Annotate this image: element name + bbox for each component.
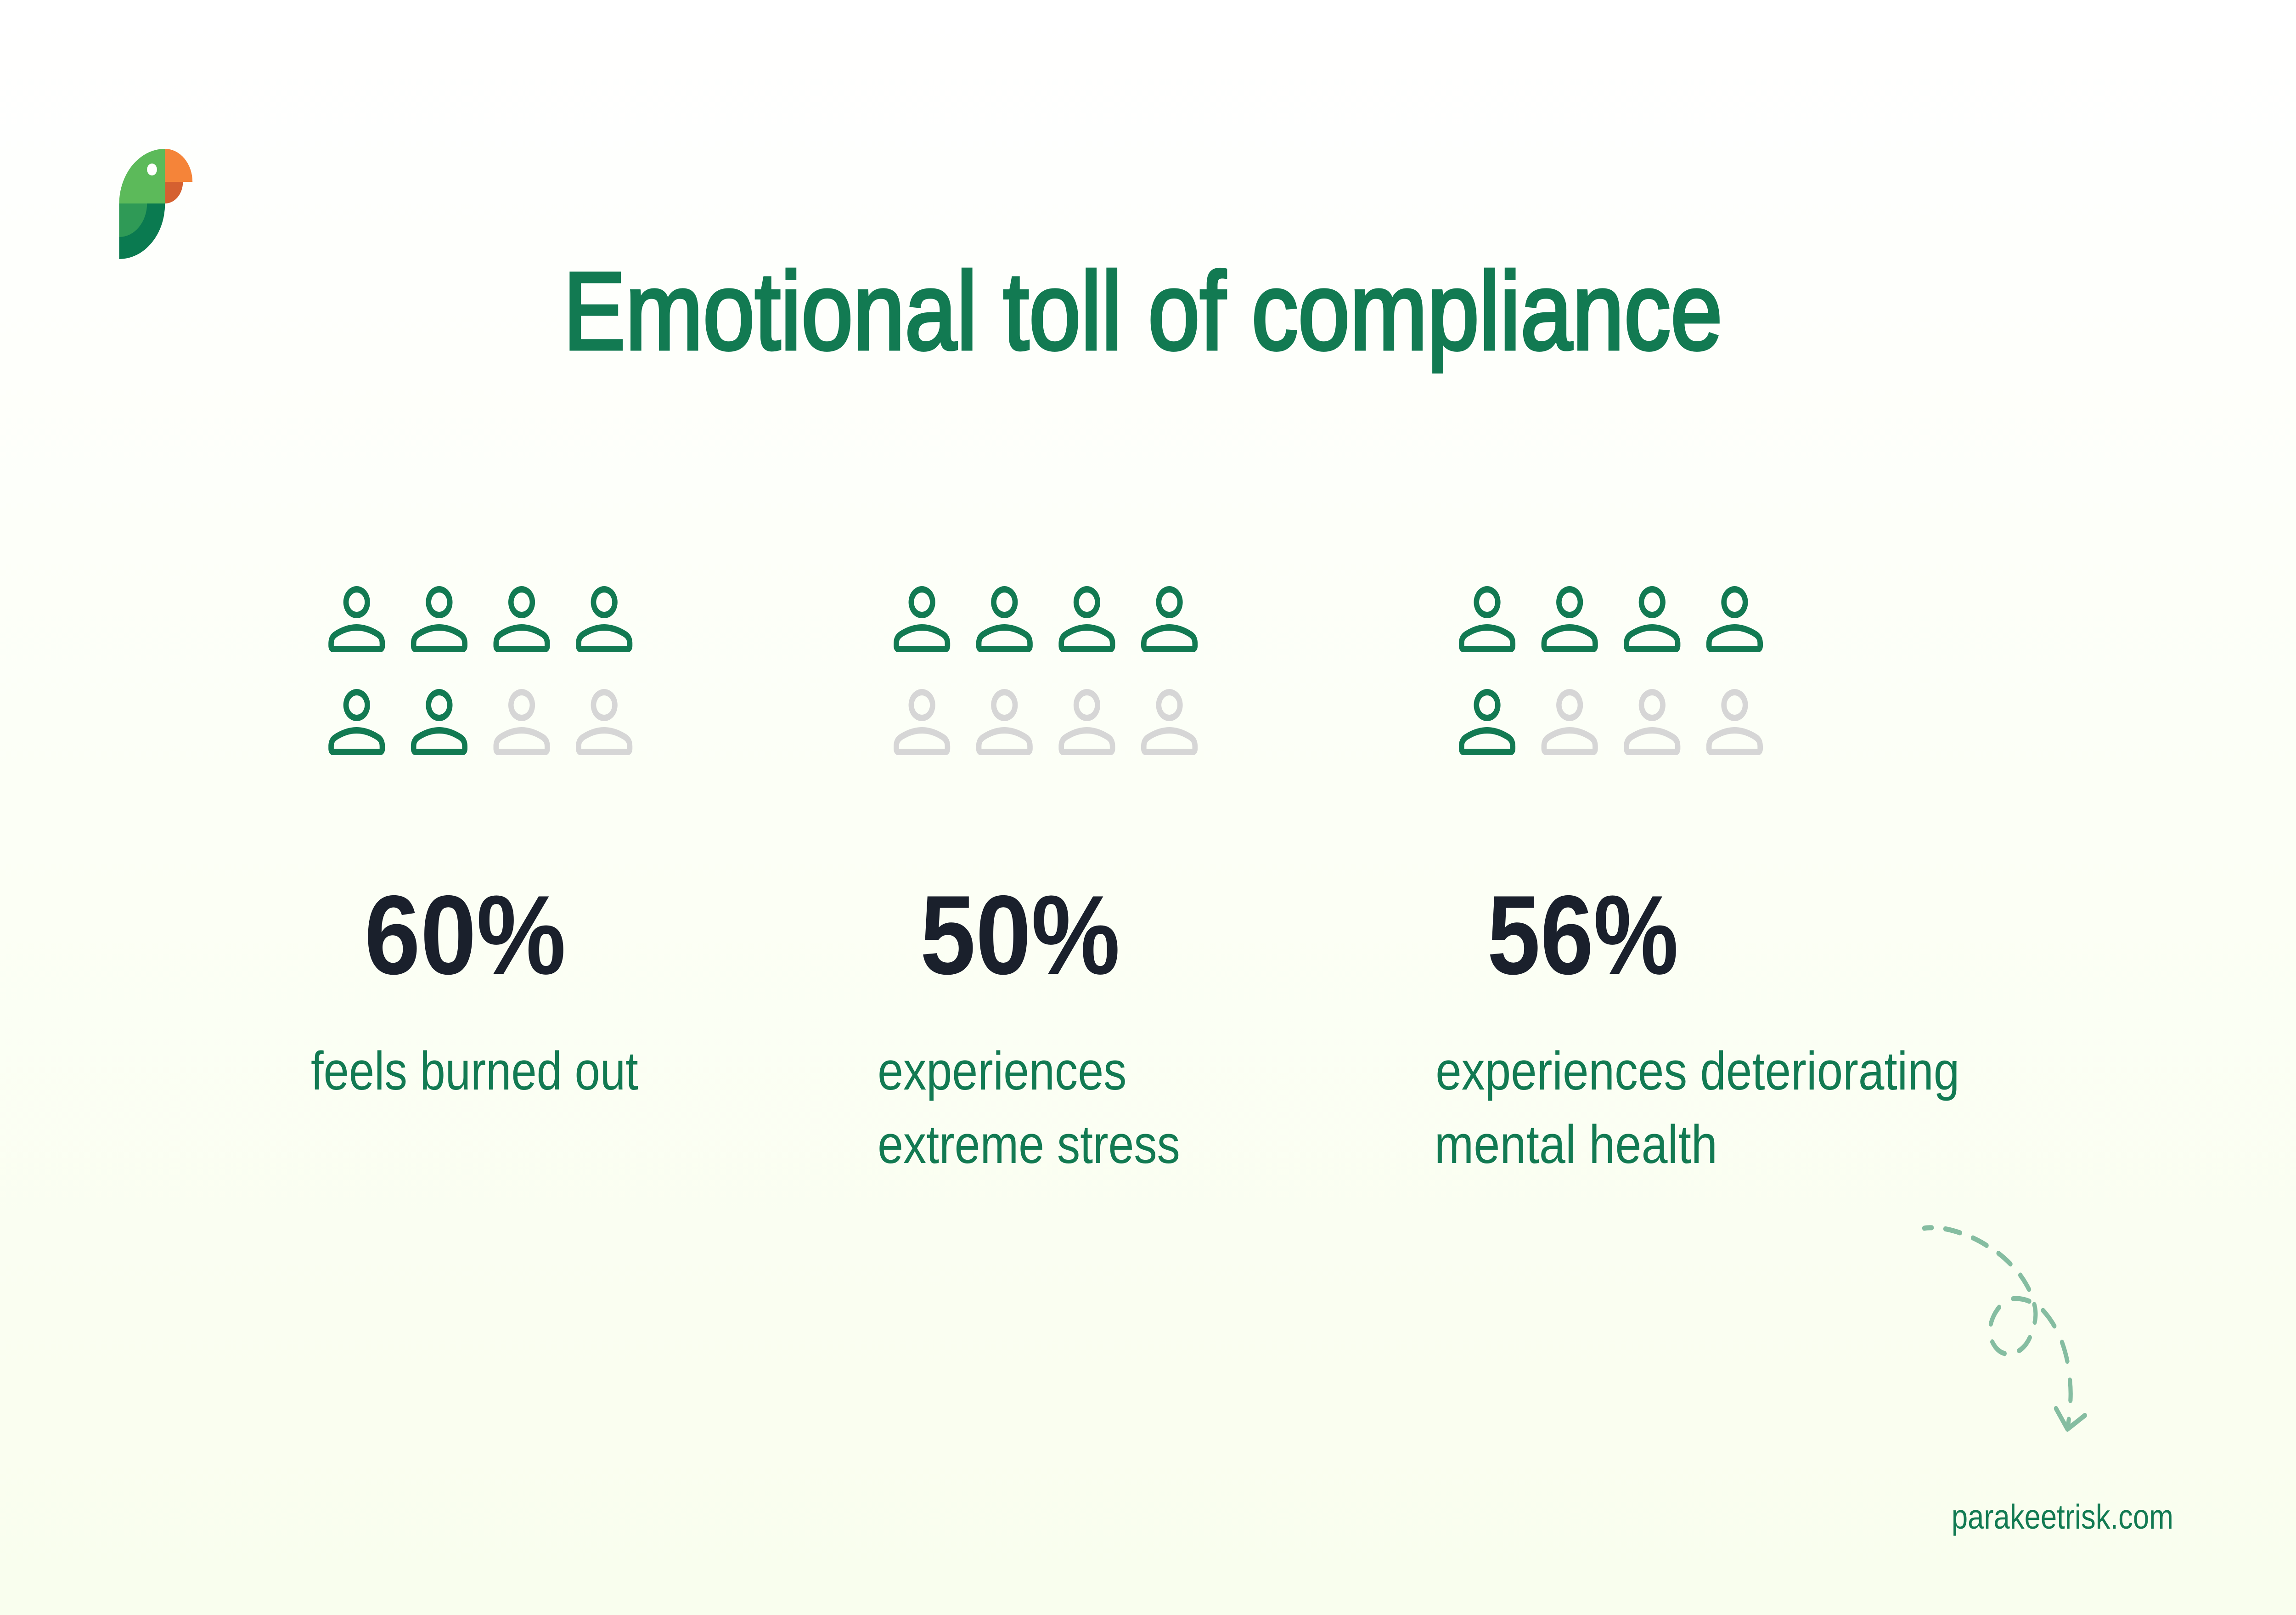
icon grid: 6 of 8 highlighted <box>328 586 632 755</box>
stat: 56%: 56% <box>1487 872 1678 998</box>
label: experiences deteriorating mental health <box>1435 1040 1959 1175</box>
title: Emotional toll of compliance <box>563 249 1722 373</box>
panel: extreme stress <box>878 586 1198 1175</box>
panel: deteriorating mental health <box>1435 586 1959 1175</box>
label: experiences deteriorating mental health: experiences deteriorating <box>1435 1040 1959 1101</box>
label: experiences extreme stress <box>878 1040 1180 1175</box>
panel: burned out <box>311 586 638 1101</box>
stat: 60%: 60% <box>364 872 566 998</box>
label: experiences extreme stress: experiences <box>878 1040 1126 1101</box>
icon grid: 5 of 8 highlighted <box>1459 586 1763 755</box>
label: feels burned out: feels burned out <box>311 1040 638 1101</box>
website url: parakeetrisk.com <box>1952 1498 2173 1536</box>
icon grid: 4 of 8 highlighted <box>894 586 1198 755</box>
label: experiences extreme stress: extreme stress <box>878 1114 1180 1175</box>
logo: parakeet <box>119 149 192 259</box>
stat: 50%: 50% <box>920 872 1120 998</box>
arrow: dashed loop pointing to website <box>1924 1228 2085 1429</box>
label: experiences deteriorating mental health: mental health <box>1435 1114 1717 1175</box>
